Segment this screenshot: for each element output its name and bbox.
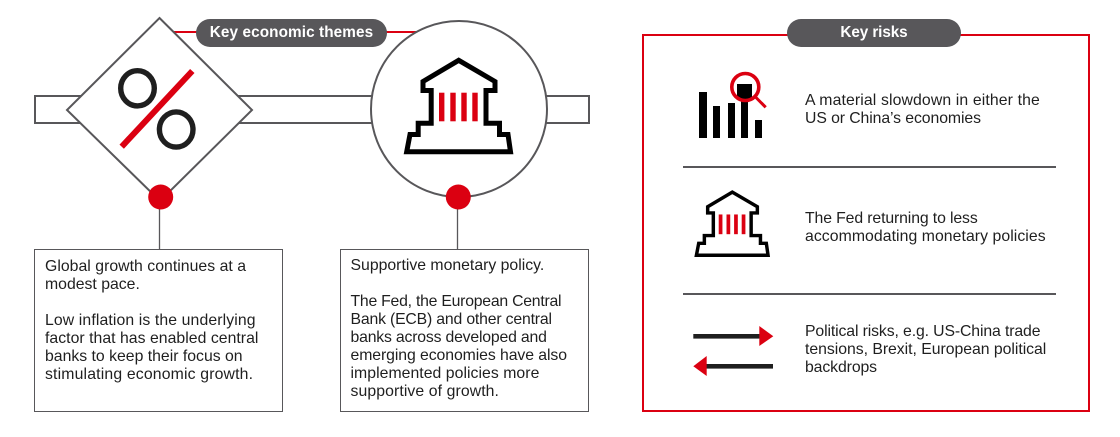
heading: key risks: Key risks	[840, 24, 908, 41]
text: global growth lead	[45, 258, 246, 292]
text: risk two: accommodating monetary policies	[805, 228, 1046, 245]
text: risk two: The Fed returning to less	[805, 210, 978, 227]
text: risk three: Political risks, e.g. US-China trade	[805, 323, 1040, 340]
text: risk one	[805, 92, 1040, 126]
horizontal band behind theme shapes	[35, 96, 589, 123]
text: global growth lead: modest pace.	[45, 276, 140, 292]
divider: first risk	[683, 166, 1056, 168]
text: low inflation: stimulating economic growth.	[45, 366, 253, 382]
heading: key economic themes: Key economic themes	[210, 24, 373, 41]
text: low inflation	[45, 312, 258, 382]
text: low inflation: Low inflation is the underlying	[45, 312, 256, 328]
connector: red line between theme shapes behind heading	[170, 31, 420, 33]
divider: second risk	[683, 293, 1056, 295]
text: central bank detail: The Fed, the European Central	[350, 293, 561, 310]
icon: percent diamond	[67, 18, 252, 201]
text: risk three: backdrops	[805, 359, 877, 376]
text: central bank detail: supportive of growth.	[350, 383, 499, 400]
icon: central bank in circle	[371, 21, 547, 197]
text: monetary policy lead: Supportive monetary policy.	[350, 257, 544, 274]
heading: key risks	[787, 19, 961, 47]
heading: key economic themes	[196, 19, 387, 47]
text: central bank detail: Bank (ECB) and other central	[350, 311, 552, 328]
text: risk one: US or China’s economies	[805, 110, 981, 126]
risks panel border	[643, 35, 1089, 411]
icon: bar chart with magnifier	[699, 74, 766, 138]
text: central bank detail	[350, 293, 567, 400]
text: risk two	[805, 210, 1046, 245]
icon: small central bank	[696, 192, 768, 255]
text: risk one: A material slowdown in either the	[805, 92, 1040, 108]
text panel: monetary policy	[340, 249, 589, 412]
text: risk three: tensions, Brexit, European political	[805, 341, 1046, 358]
red dot: right theme	[446, 184, 471, 210]
text: central bank detail: banks across developed and	[350, 329, 547, 346]
text: central bank detail: implemented policies more	[350, 365, 539, 382]
text: low inflation: banks to keep their focus on	[45, 348, 243, 364]
icon: opposing arrows	[693, 326, 773, 376]
text: global growth lead: Global growth continues at a	[45, 258, 246, 274]
text: central bank detail: emerging economies have also	[350, 347, 567, 364]
connector: right theme stem	[456, 197, 458, 250]
text panel: global growth	[34, 249, 283, 412]
text: risk three	[805, 323, 1046, 376]
red dot: left theme	[148, 184, 173, 210]
text: low inflation: factor that has enabled central	[45, 330, 258, 346]
connector: left theme stem	[158, 197, 160, 250]
